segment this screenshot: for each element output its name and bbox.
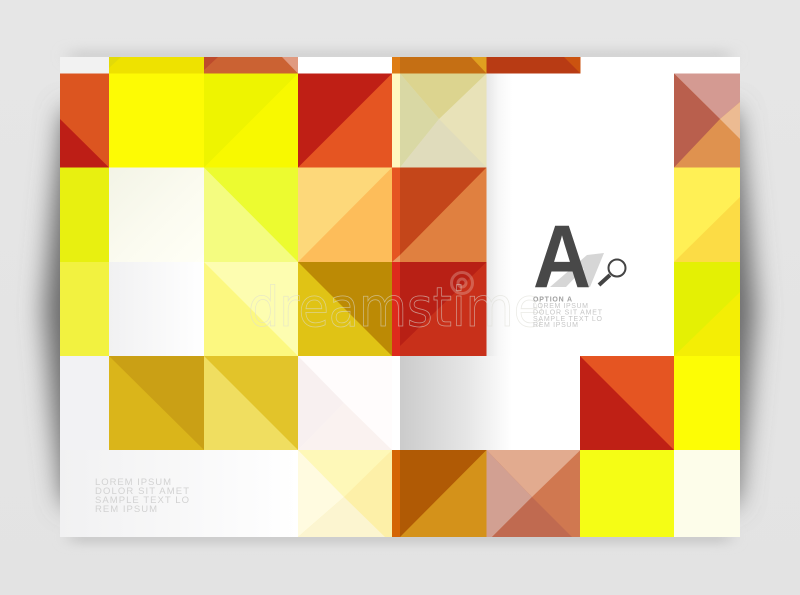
row 4 tiles	[60, 356, 740, 450]
row 1 tiles	[60, 74, 486, 168]
page shadow	[44, 50, 756, 543]
option text block: DOLOR SIT AMET	[533, 310, 603, 316]
brochure page	[60, 57, 740, 537]
option text block: OPTION A	[533, 296, 572, 304]
watermark: dreamstime	[248, 276, 544, 339]
option text block: REM IPSUM	[533, 322, 578, 329]
lorem ipsum text block: DOLOR SIT AMET	[95, 486, 189, 497]
letter A: A	[533, 206, 591, 306]
lorem ipsum text block: SAMPLE TEXT LO	[95, 495, 189, 506]
lorem ipsum text block: LOREM IPSUM	[95, 477, 171, 488]
centre fold shading	[486, 74, 512, 356]
row 5 tiles	[60, 450, 740, 537]
right column tiles	[674, 74, 740, 356]
lorem ipsum text block	[95, 477, 189, 515]
option text block	[533, 296, 603, 329]
cover logo: letter A with magnifier	[533, 206, 626, 306]
icon: magnifier	[599, 260, 626, 285]
lorem ipsum text block: REM IPSUM	[95, 504, 157, 515]
top strip row	[60, 57, 580, 74]
option text block: SAMPLE TEXT LO	[533, 316, 603, 323]
option text block: LOREM IPSUM	[533, 303, 588, 310]
row 3 tiles	[60, 262, 486, 356]
icon: grey letter shadow	[550, 253, 604, 287]
row 2 tiles	[60, 168, 486, 262]
